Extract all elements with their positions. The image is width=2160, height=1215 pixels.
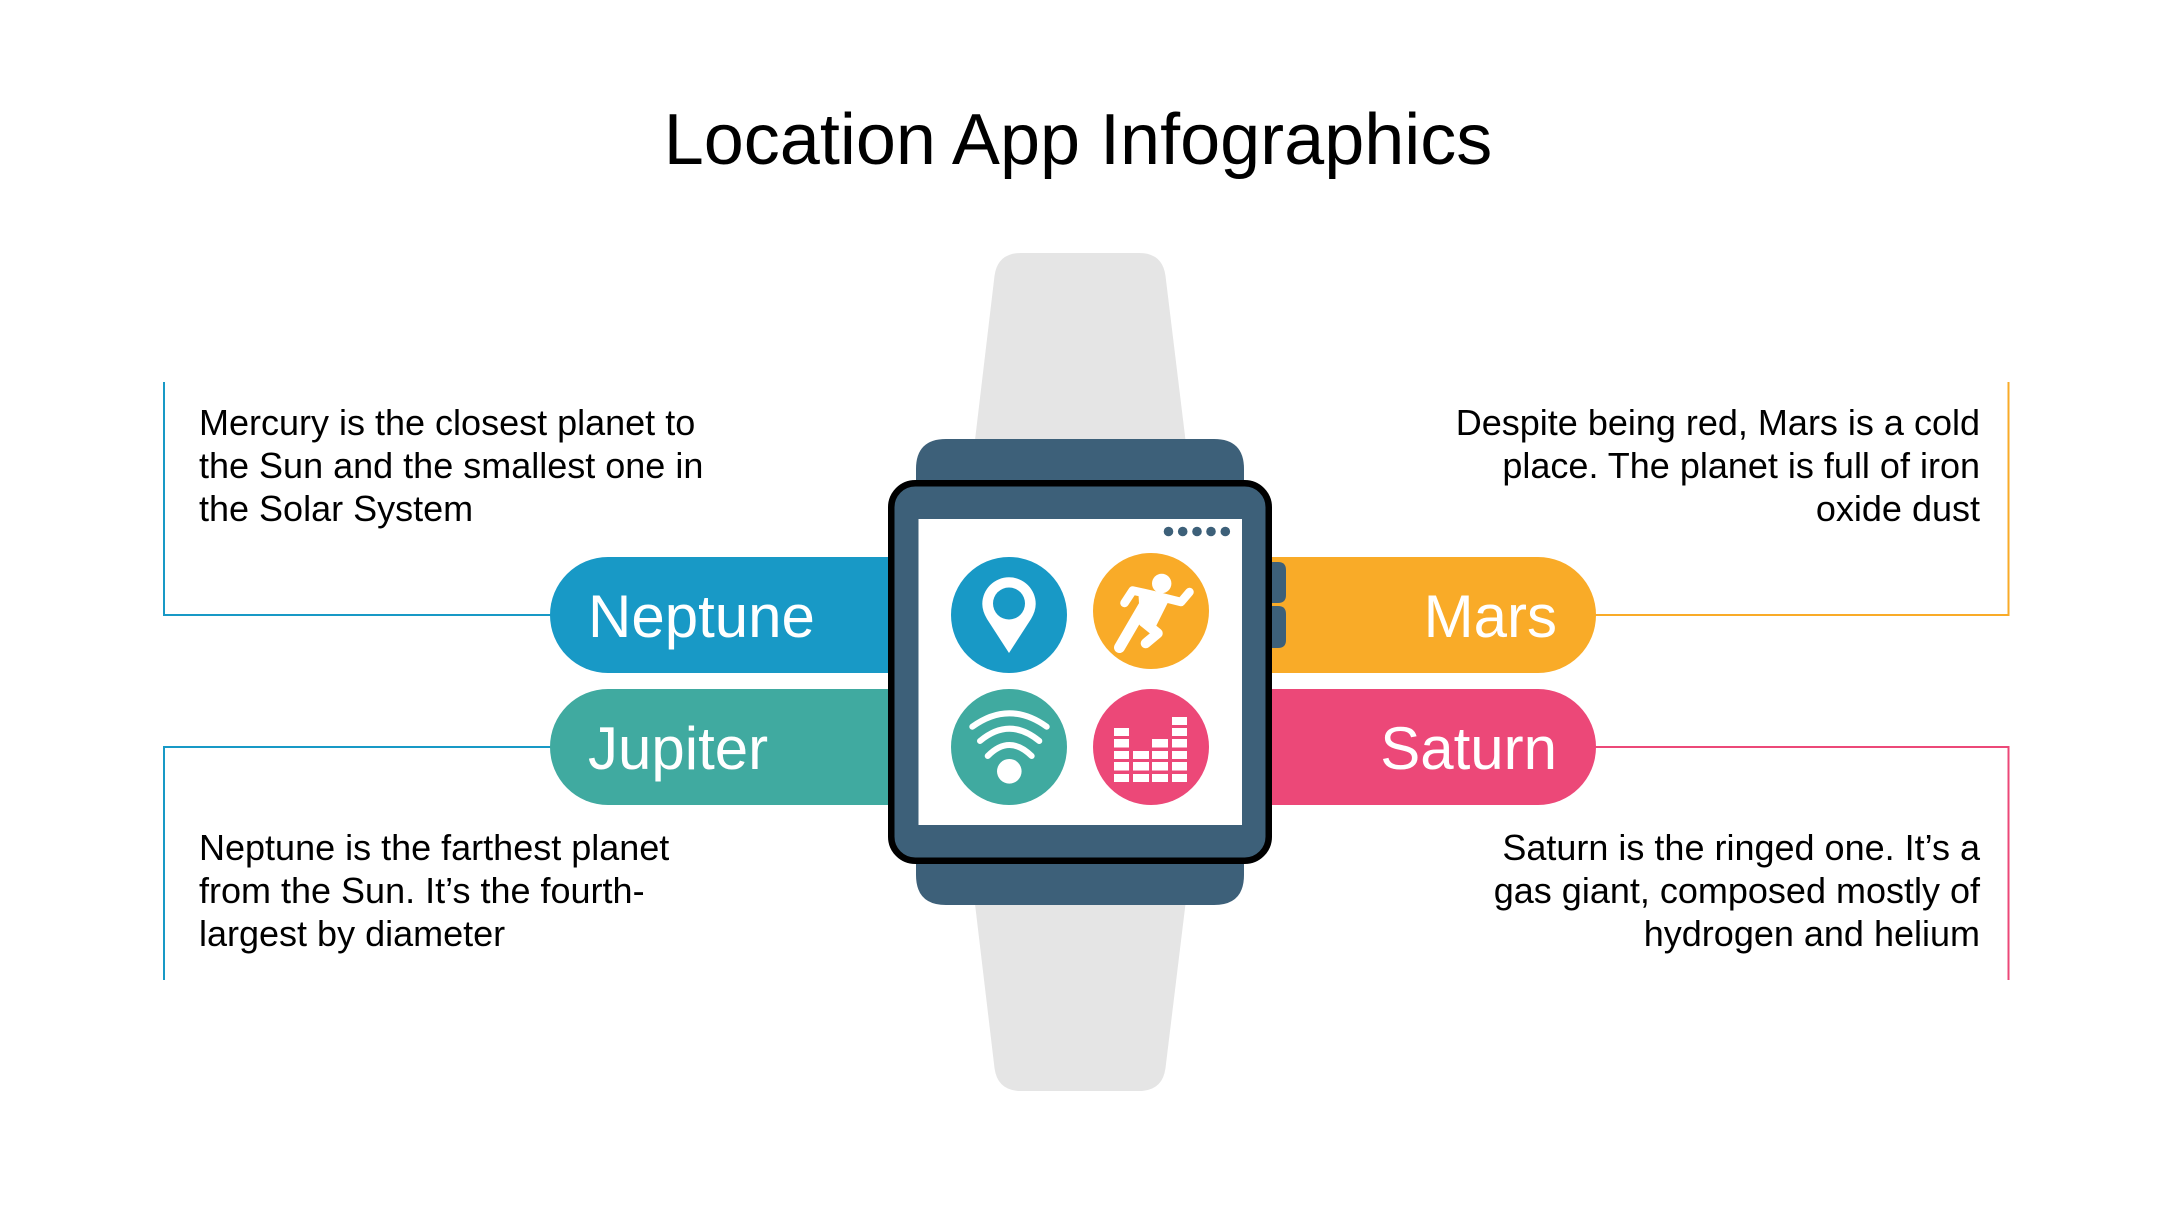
description: Neptune is the farthest planet — [199, 827, 669, 868]
description: Despite being red, Mars is a cold — [1456, 402, 1980, 443]
pill — [1260, 557, 1596, 673]
pill label: Mars — [1424, 583, 1557, 650]
connector line — [1594, 747, 2008, 980]
connector line — [164, 382, 552, 615]
connector line — [164, 747, 552, 980]
icon: location pin — [951, 557, 1067, 673]
description: oxide dust — [1816, 488, 1980, 529]
watch strap: top — [975, 253, 1186, 440]
icon: wifi — [951, 689, 1067, 805]
panel: Saturn — [1260, 689, 2008, 980]
panel: Mars — [1260, 382, 2008, 673]
pill label: Jupiter — [588, 715, 768, 782]
pill — [1260, 689, 1596, 805]
pill label: Saturn — [1380, 715, 1557, 782]
pill — [550, 689, 900, 805]
lower lug — [916, 854, 1244, 905]
smartwatch — [891, 439, 1286, 905]
side button: upper — [1265, 562, 1286, 603]
upper lug — [916, 439, 1244, 490]
description: largest by diameter — [199, 913, 505, 954]
pill label: Neptune — [588, 583, 815, 650]
description: Saturn is the ringed one. It’s a — [1502, 827, 1981, 868]
description: the Solar System — [199, 488, 473, 529]
icon: runner — [1093, 553, 1209, 669]
description: hydrogen and helium — [1644, 913, 1980, 954]
description: gas giant, composed mostly of — [1494, 870, 1981, 911]
description: from the Sun. It’s the fourth- — [199, 870, 645, 911]
side button: lower — [1265, 606, 1286, 648]
screen — [918, 519, 1242, 825]
description: Mercury is the closest planet to — [199, 402, 695, 443]
watch body — [891, 483, 1269, 861]
icon: equalizer bars — [1093, 689, 1209, 805]
pill — [550, 557, 900, 673]
watch strap: bottom — [975, 904, 1186, 1091]
panel: Jupiter — [164, 689, 900, 980]
panel: Neptune — [164, 382, 900, 673]
description: the Sun and the smallest one in — [199, 445, 703, 486]
title: Location App Infographics — [664, 100, 1492, 180]
description: place. The planet is full of iron — [1502, 445, 1980, 486]
status dots — [1164, 527, 1230, 536]
connector line — [1594, 382, 2008, 615]
